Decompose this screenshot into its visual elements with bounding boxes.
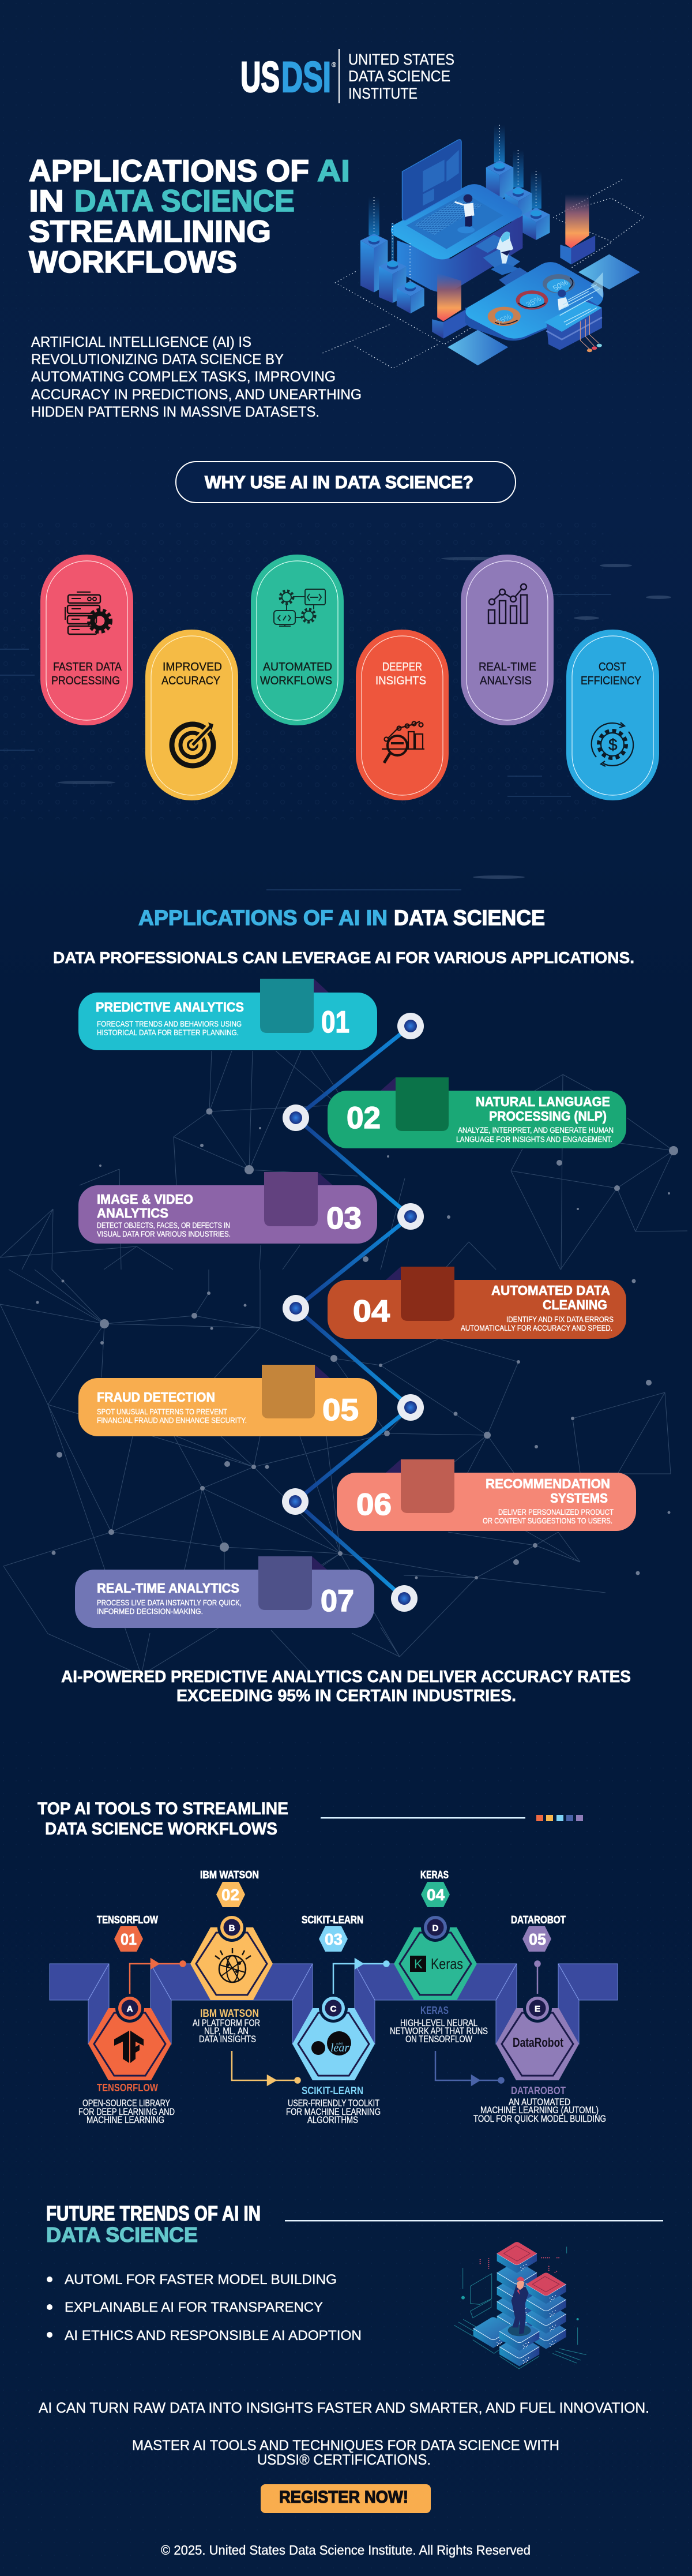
illustration: isometric data platform: 75% [495,312,513,327]
pill: real-time analysis: REAL-TIME [479,661,536,673]
logo: USDSI: DSI [281,53,331,101]
footer copyright: © 2025. United States Data Science Institute. All Rights Reserved [161,2543,531,2558]
card 06: recommendation systems: OR CONTENT SUGGESTIONS TO USERS. [483,1516,612,1525]
intro paragraph: HIDDEN PATTERNS IN MASSIVE DATASETS. [31,404,319,420]
tool B: IBM Watson: IBM WATSON [200,1869,259,1881]
tool D: Keras: D [432,1923,439,1933]
tool D: Keras: K [414,1957,423,1971]
heading: top AI tools: TOP AI TOOLS TO STREAMLINE [37,1799,288,1818]
tool C: Scikit-learn: 03 [325,1930,343,1948]
bullet list: future trends: EXPLAINABLE AI FOR TRANSPARENCY [65,2300,323,2315]
tool A: TensorFlow: TENSORFLOW [97,2082,158,2094]
tool B: IBM Watson [190,1869,273,2045]
pill: faster data processing: PROCESSING [51,675,120,687]
register button: REGISTER NOW! [279,2488,408,2507]
title: AI [317,154,350,188]
register button [261,2484,431,2513]
pill: real-time analysis [461,555,554,725]
card 06: recommendation systems [337,1459,636,1531]
card 07: real-time analytics [75,1556,374,1628]
intro paragraph: AUTOMATING COMPLEX TASKS, IMPROVING [31,369,336,385]
title: APPLICATIONS OF [29,154,309,188]
card 01: predictive analytics [78,979,377,1050]
tool A: TensorFlow: A [127,2004,133,2014]
tool A: TensorFlow: 01 [121,1930,137,1948]
card 06: recommendation systems: SYSTEMS [550,1491,608,1506]
callout: accuracy stat: EXCEEDING 95% IN CERTAIN INDUSTRIES. [176,1687,516,1705]
tool D: Keras: NETWORK API THAT RUNS [390,2025,488,2036]
button heading: why use AI [176,462,516,503]
pill: improved accuracy [145,630,238,800]
pill: real-time analysis: ANALYSIS [480,675,532,687]
call to action text [132,2438,559,2468]
tool E: DataRobot [473,1914,606,2124]
title: IN [29,184,64,218]
panel: why use AI pills [40,555,659,800]
card 02: natural language processing: NATURAL LANGUAGE [476,1094,610,1109]
title: DATA SCIENCE [74,184,295,218]
logo: USDSI: DATA SCIENCE [348,68,450,85]
card 03: image and video analytics: ANALYTICS [97,1205,168,1220]
bullet list: future trends: AI ETHICS AND RESPONSIBLE AI ADOPTION [65,2328,362,2343]
tool D: Keras: ON TENSORFLOW [405,2034,472,2045]
tool C: Scikit-learn: ALGORITHMS [307,2114,358,2125]
tool E: DataRobot: E [535,2004,540,2014]
illustration: isometric data platform [323,125,644,368]
heading: future trends: FUTURE TRENDS OF AI IN [46,2201,261,2225]
tool B: IBM Watson: 02 [221,1886,239,1904]
closing statement: AI CAN TURN RAW DATA INTO INSIGHTS FASTER AND SMARTER, AND FUEL INNOVATION. [39,2400,649,2416]
bullet list: future trends: AUTOML FOR FASTER MODEL BUILDING [65,2272,337,2287]
intro paragraph: REVOLUTIONIZING DATA SCIENCE BY [31,351,284,368]
heading: future trends: DATA SCIENCE [46,2223,198,2246]
section heading: applications: APPLICATIONS OF AI IN [138,906,388,930]
pill: faster data processing: FASTER DATA [53,661,122,673]
pill: cost efficiency [566,630,659,800]
card 04: automated data cleaning: AUTOMATED DATA [491,1283,610,1298]
card 03: image and video analytics: DETECT OBJECTS, FACES, OR DEFECTS IN [97,1220,230,1230]
tool C: Scikit-learn: learn [330,2042,355,2054]
title: STREAMLINING [29,215,271,249]
card 05: fraud detection: 05 [322,1393,359,1427]
tool C: Scikit-learn: FOR MACHINE LEARNING [286,2106,381,2117]
logo: USDSI: UNITED STATES [348,51,454,68]
tool E: DataRobot: DATAROBOT [511,1914,566,1926]
tool D: Keras: KERAS [420,2005,449,2016]
tool E: DataRobot: 05 [529,1930,546,1948]
logo: USDSI: INSTITUTE [348,85,418,102]
card 06: recommendation systems: RECOMMENDATION [486,1476,610,1491]
tool D: Keras: KERAS [420,1869,449,1881]
tool B: IBM Watson: DATA INSIGHTS [199,2034,256,2045]
card 05: fraud detection [78,1365,377,1436]
illustration: isometric data platform: 35% [525,294,543,309]
card 05: fraud detection: FRAUD DETECTION [97,1390,215,1405]
logo: USDSI: ® [332,62,336,69]
tool E: DataRobot: AN AUTOMATED [509,2096,570,2107]
intro paragraph: ARTIFICIAL INTELLIGENCE (AI) IS [31,334,251,350]
connector arrows [130,1959,540,2085]
pill: deeper insights: DEEPER [382,661,422,673]
card 07: real-time analytics: PROCESS LIVE DATA INSTANTLY FOR QUICK, [97,1598,242,1607]
card 05: fraud detection: SPOT UNUSUAL PATTERNS TO PREVENT [97,1407,227,1416]
tool C: Scikit-learn: SCIKIT-LEARN [302,2085,363,2096]
logo: USDSI: US [240,53,280,101]
card 01: predictive analytics: HISTORICAL DATA FOR BETTER PLANNING. [97,1028,239,1037]
section heading: applications [138,906,545,930]
tool B: IBM Watson: AI PLATFORM FOR [193,2017,260,2028]
card 02: natural language processing: LANGUAGE FOR INSIGHTS AND ENGAGEMENT. [456,1135,612,1144]
card 02: natural language processing: 02 [347,1101,381,1135]
card 05: fraud detection: FINANCIAL FRAUD AND ENHANCE SECURITY. [97,1416,247,1425]
pill: cost efficiency: $ [608,736,618,754]
heading: top AI tools: DATA SCIENCE WORKFLOWS [45,1819,277,1839]
pill: deeper insights [356,630,449,800]
tool C: Scikit-learn: USER-FRIENDLY TOOLKIT [288,2098,379,2109]
button heading: why use AI: WHY USE AI IN DATA SCIENCE? [205,472,473,492]
card 02: natural language processing [328,1077,626,1148]
card 07: real-time analytics: INFORMED DECISION-MAKING. [97,1607,203,1616]
callout: accuracy stat [61,1668,631,1705]
card 04: automated data cleaning: CLEANING [543,1297,607,1312]
tool E: DataRobot: DataRobot [513,2035,564,2050]
tool A: TensorFlow: MACHINE LEARNING [86,2114,164,2125]
call to action text: MASTER AI TOOLS AND TECHNIQUES FOR DATA SCIENCE WITH [132,2438,559,2454]
title: WORKFLOWS [29,245,237,279]
tool C: Scikit-learn: SCIKIT-LEARN [302,1914,363,1926]
pill: automated workflows: WORKFLOWS [260,675,332,687]
card 07: real-time analytics: 07 [321,1584,354,1618]
card 03: image and video analytics: IMAGE & VIDEO [97,1192,193,1207]
tool B: IBM Watson: IBM WATSON [200,2008,259,2019]
tool A: TensorFlow: FOR DEEP LEARNING AND [78,2106,175,2117]
pill: faster data processing [40,555,133,725]
tool B: IBM Watson: NLP, ML, AN [204,2025,249,2036]
network mesh background [0,1051,687,1675]
tool A: TensorFlow: TENSORFLOW [97,1914,158,1926]
tool C: Scikit-learn: C [330,2004,337,2014]
card 04: automated data cleaning: 04 [353,1294,390,1328]
tool E: DataRobot: TOOL FOR QUICK MODEL BUILDING [473,2113,606,2124]
card 04: automated data cleaning [328,1267,626,1339]
tool A: TensorFlow [78,1914,175,2125]
bullet list: future trends [47,2272,362,2343]
connector zigzag [295,1026,411,1598]
pill: improved accuracy: ACCURACY [161,675,220,687]
card 03: image and video analytics: VISUAL DATA FOR VARIOUS INDUSTRIES. [97,1229,231,1238]
heading: top AI tools [37,1799,583,1839]
card 02: natural language processing: PROCESSING (NLP) [489,1109,607,1124]
illustration: isometric data platform: 50% [551,278,570,293]
pill: cost efficiency: EFFICIENCY [581,675,641,687]
card 06: recommendation systems: 06 [356,1488,392,1522]
tool C: Scikit-learn [286,1914,381,2125]
illustration: server stacks and analyst [454,2242,586,2369]
callout: accuracy stat: AI-POWERED PREDICTIVE ANALYTICS CAN DELIVER ACCURACY RATES [61,1668,631,1686]
pill: automated workflows [251,555,344,725]
card 02: natural language processing: ANALYZE, INTERPRET, AND GENERATE HUMAN [458,1125,614,1135]
pill: automated workflows: AUTOMATED [263,661,332,673]
tool E: DataRobot: DATAROBOT [511,2085,566,2096]
card 04: automated data cleaning: IDENTIFY AND FIX DATA ERRORS [506,1315,614,1324]
pill: deeper insights: INSIGHTS [375,675,426,687]
card 03: image and video analytics: 03 [326,1201,362,1235]
card 04: automated data cleaning: AUTOMATICALLY FOR ACCURACY AND SPEED. [461,1323,612,1332]
tool D: Keras: 04 [427,1886,445,1904]
intro paragraph: ACCURACY IN PREDICTIONS, AND UNEARTHING [31,387,362,403]
card 01: predictive analytics: PREDICTIVE ANALYTICS [96,999,244,1014]
tool D: Keras: HIGH-LEVEL NEURAL [400,2017,477,2028]
pill: improved accuracy: IMPROVED [163,661,222,673]
tool B: IBM Watson: B [229,1923,235,1933]
title [29,154,350,279]
tool E: DataRobot: MACHINE LEARNING (AUTOML) [480,2105,599,2116]
band: process ribbon [50,1964,618,2044]
card 06: recommendation systems: DELIVER PERSONALIZED PRODUCT [498,1507,614,1517]
section heading: applications: DATA SCIENCE [394,906,545,930]
card 01: predictive analytics: 01 [321,1005,349,1039]
subheading: DATA PROFESSIONALS CAN LEVERAGE AI FOR VARIOUS APPLICATIONS. [53,949,634,967]
tool C: Scikit-learn: scikit [336,2042,343,2046]
card 07: real-time analytics: REAL-TIME ANALYTICS [97,1581,239,1596]
intro paragraph [31,334,362,420]
pill: cost efficiency: COST [599,661,626,673]
tool D: Keras [390,1869,488,2045]
card 01: predictive analytics: FORECAST TRENDS AND BEHAVIORS USING [97,1019,242,1028]
logo: USDSI [240,49,454,103]
timeline nodes [282,1013,424,1612]
heading: future trends [46,2201,663,2246]
tool A: TensorFlow: OPEN-SOURCE LIBRARY [82,2098,170,2109]
call to action text: USDSI® CERTIFICATIONS. [257,2452,431,2468]
tool D: Keras: Keras [431,1955,463,1972]
card 03: image and video analytics [78,1172,377,1244]
